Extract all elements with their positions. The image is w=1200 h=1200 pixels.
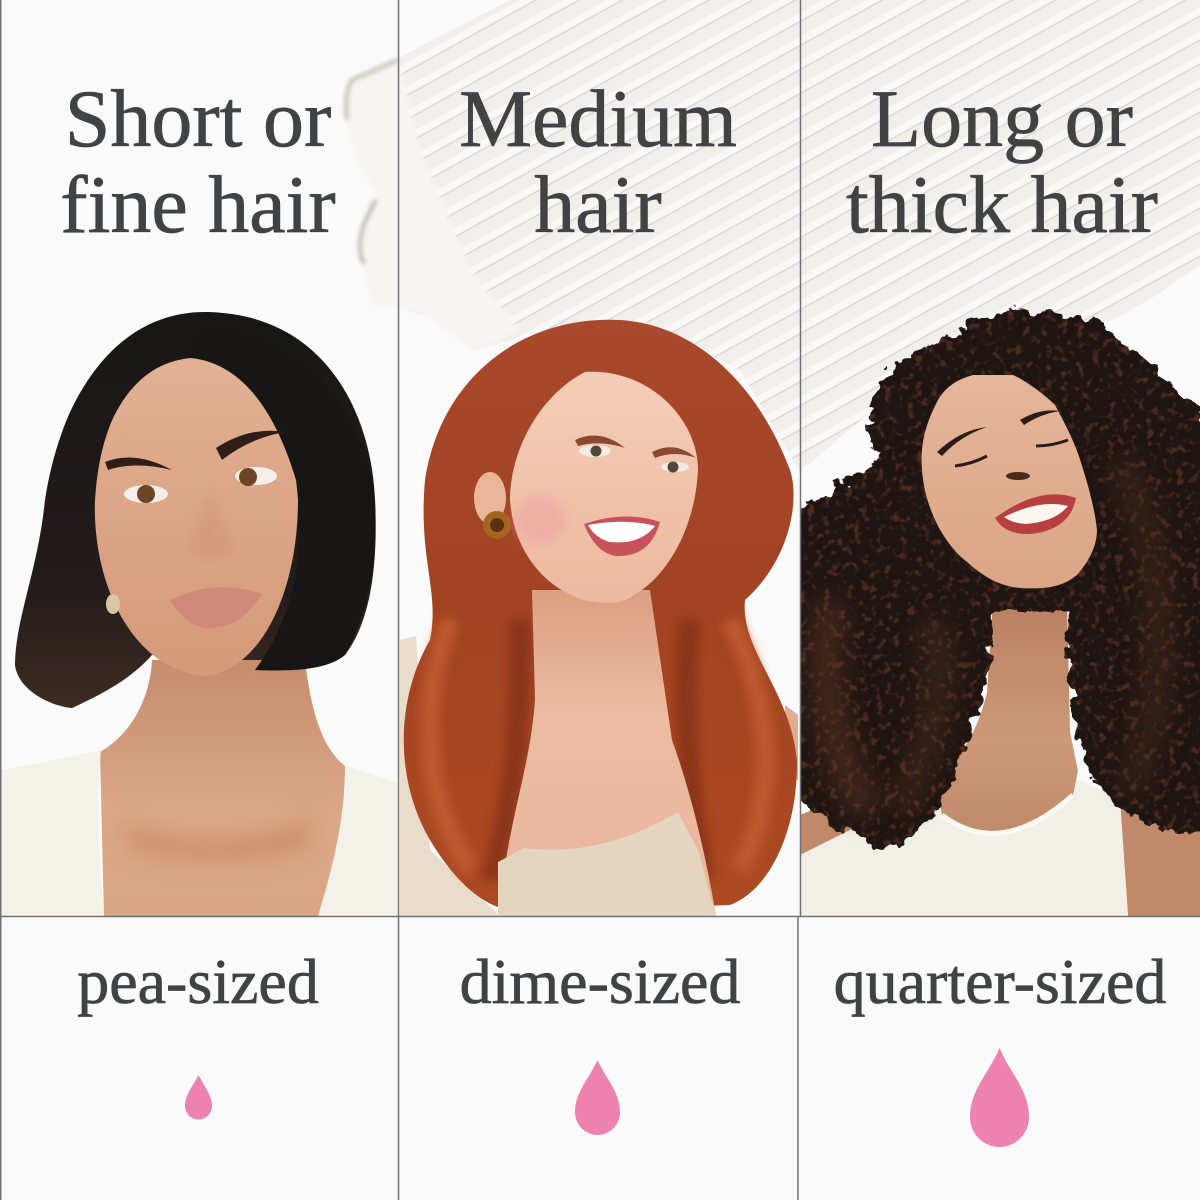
dose label: pea-sized: pea-sized xyxy=(77,946,319,1017)
heading: long or thick hair: thick hair xyxy=(846,159,1158,250)
heading: short or fine hair: fine hair xyxy=(60,159,336,250)
heading: medium hair: hair xyxy=(534,159,662,250)
icon: large pink drop xyxy=(970,1048,1029,1147)
panel: bottom band background xyxy=(0,916,1200,1200)
portrait: woman with curly dark hair xyxy=(790,311,1200,916)
cream swatch xyxy=(345,0,1200,472)
heading: medium hair: Medium xyxy=(459,73,737,164)
heading: long or thick hair: Long or xyxy=(871,73,1133,164)
heading: short or fine hair: Short or xyxy=(65,73,331,164)
icon: small pink drop xyxy=(185,1075,212,1120)
icon: medium pink drop xyxy=(575,1060,620,1135)
panel: long or thick hair xyxy=(790,73,1200,916)
panel: short or fine hair xyxy=(0,73,397,916)
portrait: woman with long red hair xyxy=(400,320,798,916)
dose label: dime-sized: dime-sized xyxy=(460,946,740,1017)
dose label: quarter-sized: quarter-sized xyxy=(834,946,1166,1017)
portrait: woman with black bob xyxy=(0,312,397,916)
panel: medium hair xyxy=(400,73,798,916)
